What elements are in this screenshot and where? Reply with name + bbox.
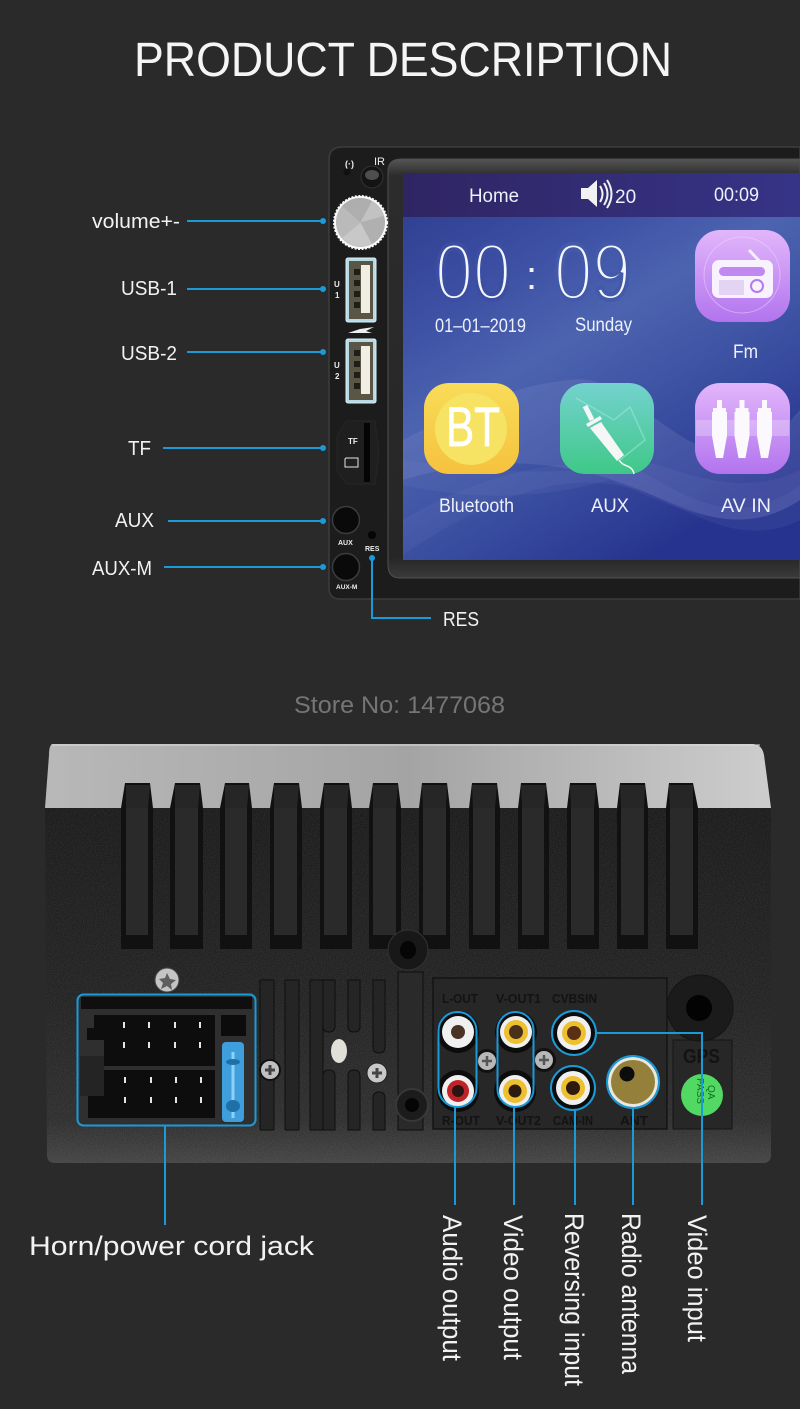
av in label: AV IN — [721, 496, 771, 517]
icon: white plug — [331, 1039, 347, 1063]
panel: head unit front — [329, 147, 800, 599]
icon: tf slot: TF — [348, 437, 358, 446]
screen bezel — [388, 159, 800, 578]
callout: usb-2: USB-2 — [121, 343, 177, 365]
bluetooth label: Bluetooth — [439, 496, 514, 517]
callout: video input — [596, 1033, 712, 1342]
connector pins — [123, 1022, 202, 1103]
screen waves — [403, 379, 800, 555]
callout: aux — [115, 510, 326, 532]
panel: iso connector — [78, 994, 256, 1126]
audio ports — [437, 1011, 479, 1112]
title: PRODUCT DESCRIPTION — [134, 34, 672, 87]
icon: bluetooth: BT — [446, 395, 500, 458]
port labels: CVBSIN — [552, 991, 597, 1006]
icon: volume knob — [334, 196, 387, 249]
icon: blue fuse — [222, 1042, 244, 1122]
icon: rca screws — [475, 1048, 556, 1073]
icon: usb port 2 — [346, 339, 376, 403]
icon: mounting hole — [388, 930, 428, 970]
radio antenna port — [608, 1057, 658, 1107]
icon: speaker — [581, 180, 612, 208]
icon: bluetooth — [424, 383, 519, 474]
reversing input port — [552, 1067, 594, 1109]
store number: Store No: 1477068 — [294, 692, 505, 719]
port labels: R-OUT — [442, 1113, 480, 1128]
callout outlines — [438, 1011, 659, 1110]
ir label: IR — [374, 156, 385, 168]
callout: aux-m: AUX-M — [92, 558, 152, 580]
video input port — [553, 1012, 595, 1054]
port labels: V-OUT1 — [496, 991, 541, 1006]
fm label: Fm — [733, 342, 758, 363]
vent slots — [260, 972, 423, 1130]
date: 01–01–2019 — [435, 316, 526, 337]
connector highlight — [78, 994, 256, 1126]
usb 1 number: 1 — [335, 291, 340, 300]
port labels: L-OUT — [442, 991, 478, 1006]
callout: usb-1 — [121, 278, 326, 300]
panel: screen — [403, 173, 800, 560]
silver top cover — [45, 744, 771, 808]
usb 2 marking: U — [334, 361, 340, 370]
icon: res hole: RES — [365, 546, 380, 553]
callout: reversing input: Reversing input — [559, 1213, 589, 1386]
callout: video input: Video input — [682, 1215, 712, 1342]
panel: gps: QA — [705, 1085, 716, 1100]
clock: 09 — [554, 227, 631, 316]
callout: res — [369, 555, 479, 631]
callout: tf — [128, 438, 326, 460]
icon: fm radio — [695, 230, 790, 322]
icon: aux-m jack — [332, 554, 360, 591]
icon: screw middle — [367, 1063, 387, 1083]
port labels — [442, 991, 648, 1128]
gps grommet — [667, 975, 733, 1041]
callout: usb-2 — [121, 343, 326, 365]
volume value: 20 — [615, 187, 636, 208]
panel: gps — [667, 975, 733, 1129]
port labels: ANT — [620, 1113, 648, 1128]
port labels: V-OUT2 — [496, 1113, 541, 1128]
icon: av in — [695, 383, 790, 474]
icon: aux-m jack: AUX-M — [336, 584, 357, 591]
rear body — [45, 808, 771, 1163]
clock: 00 — [435, 227, 511, 316]
gps label: GPS — [683, 1046, 720, 1068]
port labels: CAM-IN — [553, 1113, 593, 1128]
callout: audio output: Audio output — [437, 1215, 467, 1361]
icon: usb port 1 — [346, 258, 376, 322]
icon: aux jack — [332, 506, 360, 547]
qa pass sticker — [681, 1074, 723, 1116]
side panel marks: signal: (·) — [345, 159, 354, 169]
callout: res: RES — [443, 609, 479, 631]
video output ports — [494, 1011, 537, 1112]
callout: horn power cord jack: Horn/power cord jack — [29, 1231, 315, 1261]
callout: volume: volume+- — [92, 211, 180, 233]
icon: ir lens — [344, 166, 383, 188]
weekday: Sunday — [575, 315, 632, 336]
icon: usb symbol — [348, 327, 374, 333]
icon: small jack — [396, 1089, 428, 1121]
callout: aux-m — [92, 558, 326, 580]
status time: 00:09 — [714, 185, 759, 206]
panel: rear housing — [45, 744, 771, 1163]
icon: aux jack: AUX — [338, 540, 353, 547]
icon: res hole — [365, 531, 380, 553]
head unit frame — [329, 147, 800, 599]
callout: tf: TF — [128, 438, 151, 460]
usb 2 number: 2 — [335, 372, 340, 381]
top status bar — [403, 173, 800, 217]
icon: aux — [560, 383, 654, 474]
body texture — [45, 808, 771, 1163]
heat sink fins — [121, 783, 698, 949]
icon: screw top — [155, 968, 179, 992]
clock: : — [526, 254, 537, 298]
callout: radio antenna: Radio antenna — [616, 1213, 646, 1375]
callout: volume — [92, 211, 326, 233]
panel: gps: PASS — [694, 1078, 705, 1104]
callout: video output: Video output — [498, 1215, 528, 1360]
icon: tf slot — [337, 421, 379, 484]
status text: home: Home — [469, 186, 519, 207]
usb 1 marking: U — [334, 280, 340, 289]
aux label: AUX — [591, 496, 629, 517]
panel: rca recess — [433, 978, 667, 1129]
callout: usb-1: USB-1 — [121, 278, 177, 300]
clock — [435, 227, 631, 316]
icon: screw right — [260, 1060, 280, 1080]
callout: aux: AUX — [115, 510, 154, 532]
